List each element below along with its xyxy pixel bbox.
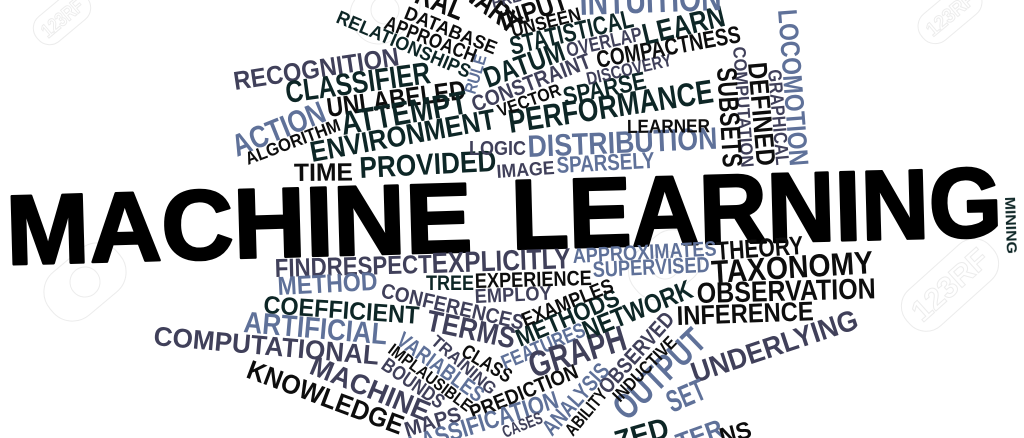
word: supervised: SUPERVISED [592,252,710,282]
word: relationships: RELATIONSHIPS [333,7,474,83]
word: attempt: ATTEMPT [338,83,470,142]
word: approach: APPROACH [381,12,480,67]
watermark stamps [27,0,1008,340]
watermark stamps: 123RF [905,242,996,328]
word: explicitly: EXPLICITLY [431,243,571,280]
word: logic: LOGIC [469,138,526,160]
word: defined: DEFINED [742,61,781,167]
word: learner: LEARNER [627,116,710,138]
word: constraint: CONSTRAINT [468,48,595,117]
word: variables: VARIABLES [392,327,489,407]
word: conferences: CONFERENCES [379,279,526,335]
word: theory: THEORY [715,230,804,266]
word: time: TIME [294,158,353,187]
word: terms: TERMS [424,305,518,356]
word: image: IMAGE [496,158,555,183]
word: underlying: UNDERLYING [687,304,862,390]
word: action: ACTION [227,94,330,163]
word: set: SET [661,372,711,419]
word: vector: VECTOR [495,80,564,121]
word: environment: ENVIRONMENT [308,104,498,169]
word: implausible: IMPLAUSIBLE [385,340,476,415]
word: locomotion: LOCOMOTION [772,8,814,167]
word: machine: MACHINE [306,350,435,427]
word: approximates: APPROXIMATES [572,237,717,268]
word: mining: MINING [1001,197,1020,254]
word: compactness: COMPACTNESS [594,21,743,74]
word: discovery: DISCOVERY [584,50,674,89]
word: training: TRAINING [427,332,500,399]
word: taxonomy: TAXONOMY [710,244,874,290]
word: recognition: RECOGNITION [231,41,401,96]
word: unlabeled: UNLABELED [325,75,468,123]
title [4,146,1003,285]
word: sparsely: SPARSELY [556,147,655,178]
word: find respect: FINDRESPECT [274,249,432,283]
word: class: CLASS [457,340,516,388]
word: features: FEATURES [498,319,589,375]
word: computational: COMPUTATIONAL [152,321,380,371]
word: observed: OBSERVED [593,307,679,398]
word: subsets: SUBSETS [711,66,748,168]
word: unseen: UNSEEN [509,4,583,42]
word: tree: TREE [426,272,474,295]
word: network: NETWORK [578,274,697,346]
word: distribution: DISTRIBUTION [527,121,718,164]
word: provided: PROVIDED [359,145,497,185]
word: database: DATABASE [401,3,500,59]
word: output: OUTPUT [604,320,714,428]
word: overlap: OVERLAP [564,24,644,62]
word: observation: OBSERVATION [696,273,876,310]
word: methods: METHODS [511,284,624,353]
upper word cloud [227,0,743,187]
word: employ: EMPLOY [474,283,553,308]
word: method: METHOD [277,266,378,301]
word: classifier: CLASSIFIER [283,55,433,110]
vertical word column [711,8,1020,254]
word: examples: EXAMPLES [519,275,617,332]
word: inductive: INDUCTIVE [608,332,681,406]
word: artificial: ARTIFICIAL [242,306,389,352]
word: analysis: ANALYSIS [536,358,615,438]
word: algorithm: ALGORITHM [242,115,343,169]
word: sparse: SPARSE [561,67,649,111]
word: datum: DATUM [479,36,569,95]
word: performance: PERFORMANCE [506,72,716,140]
word: prediction: PREDICTION [466,360,581,425]
title word: machine: MACHINE [4,162,473,285]
word: coefficient: COEFFICIENT [263,291,420,330]
word: experience: EXPERIENCE [475,267,592,293]
word: computation: COMPUTATION [729,46,757,168]
word: graphical: GRAPHICAL [763,69,792,166]
word: ability: ABILITY [561,385,611,438]
word: inference: INFERENCE [676,296,814,331]
lower word cloud [152,230,876,438]
title word: learning: LEARNING [510,146,1003,270]
word: graph: GRAPH [523,317,631,386]
word: bounds: BOUNDS [377,354,449,413]
word: rule: RULE [461,52,491,96]
